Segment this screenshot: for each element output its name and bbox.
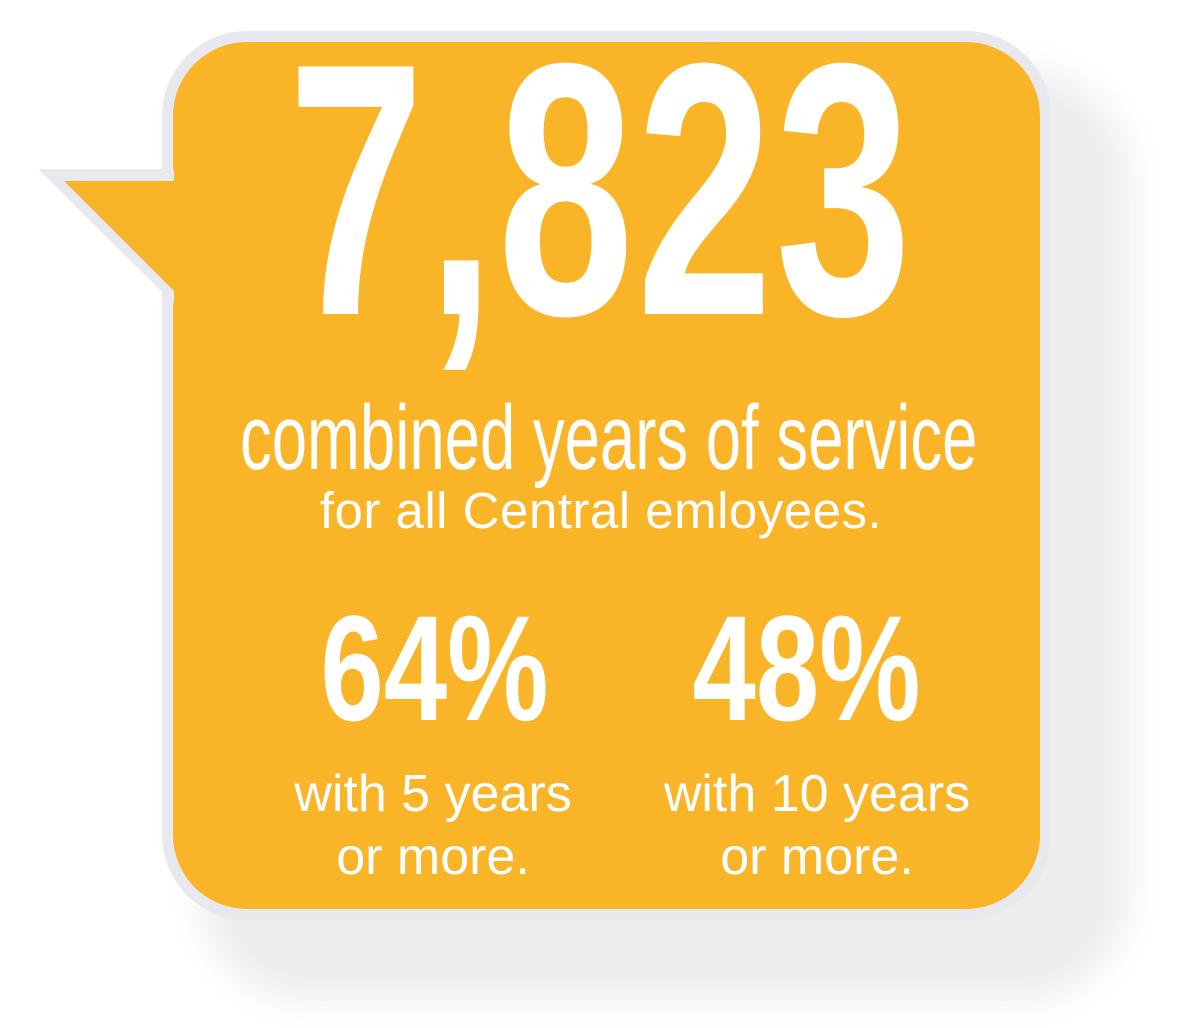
big number: 7,823 — [288, 0, 914, 391]
subtitle: combined years of service: combined years of service — [240, 387, 977, 489]
caption: 10 years — [664, 765, 970, 886]
caption: 5 years: with 5 years — [294, 765, 572, 823]
caption: 10 years: with 10 years — [664, 765, 970, 823]
caption: 5 years: or more. — [336, 828, 530, 886]
text: for all Central emloyees: for all Central emloyees. — [320, 482, 882, 539]
stat: 64%: 64% — [320, 584, 549, 752]
stat: 48%: 48% — [692, 584, 921, 752]
caption: 10 years: or more. — [720, 828, 914, 886]
shadow — [200, 70, 1130, 1000]
caption: 5 years — [294, 765, 572, 886]
bubble body — [162, 31, 1051, 920]
